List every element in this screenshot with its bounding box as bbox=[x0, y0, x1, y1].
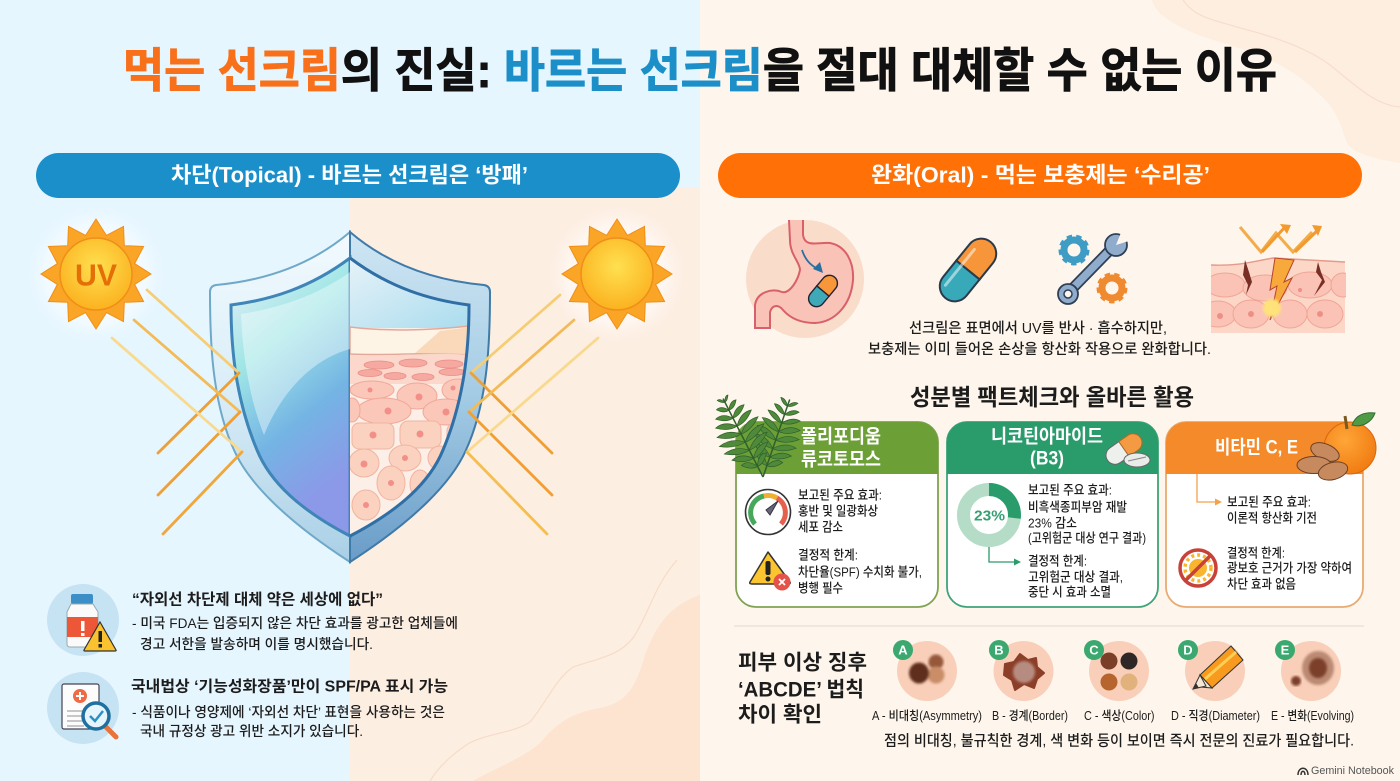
shield inner right rim bbox=[350, 258, 469, 536]
icon: no sun bbox=[1180, 550, 1216, 586]
card: nicotinamide: 보고된 주요 효과: bbox=[1028, 482, 1112, 498]
heading: ingredient fact check: 성분별 팩트체크와 올바른 활용 bbox=[910, 384, 1194, 410]
icon: sun bbox=[561, 218, 673, 330]
icon: stomach with capsule bbox=[746, 220, 864, 338]
text block: domestic law: 국내법상 ‘기능성화장품’만이 SPF/PA 표시 가능 bbox=[131, 678, 448, 696]
icon: C color: C bbox=[1089, 642, 1099, 658]
shield bbox=[210, 232, 490, 562]
icon: document with magnifier bbox=[47, 672, 119, 744]
icon: D diameter pencil: D bbox=[1183, 642, 1193, 658]
ABCDE labels: A - 비대칭(Asymmetry) bbox=[872, 709, 982, 723]
title: 먹는 선크림의 진실: 바르는 선크림을 절대 대체할 수 없는 이유 bbox=[123, 44, 1277, 96]
icon: pills bbox=[1102, 430, 1150, 468]
shield inner glass bbox=[231, 258, 350, 536]
card: polypodium bbox=[700, 386, 938, 607]
icon: B border bbox=[989, 640, 1054, 701]
icon: D diameter pencil bbox=[1178, 640, 1245, 701]
card: polypodium: 병행 필수 bbox=[798, 580, 843, 596]
card: vitamin C, E: 비타민 C, E bbox=[1215, 436, 1298, 458]
text block: domestic law: - 식품이나 영양제에 ‘자외선 차단’ 표현을 사용하는 것은 bbox=[132, 704, 445, 720]
icon: wrench and gears bbox=[1058, 230, 1132, 304]
header: oral bbox=[718, 153, 1362, 198]
text: mechanism explanation: 보충제는 이미 들어온 손상을 항산화 작용으로 완화합니다. bbox=[868, 341, 1211, 358]
icon: damaged skin bbox=[1211, 224, 1346, 333]
header: topical bbox=[36, 153, 680, 198]
header: topical: 차단(Topical) - 바르는 선크림은 ‘방패’ bbox=[171, 162, 528, 188]
icon: medicine bottle warning bbox=[47, 584, 119, 656]
watermark: Gemini Notebook bbox=[1311, 765, 1394, 777]
icon: UV rays left bbox=[112, 290, 242, 534]
card: vitamin C, E: 결정적 한계: bbox=[1227, 546, 1285, 560]
icon: C color bbox=[1084, 640, 1149, 701]
ABCDE labels bbox=[872, 709, 1354, 723]
card: vitamin C, E: 이론적 항산화 기전 bbox=[1227, 510, 1317, 526]
card: vitamin C, E: 차단 효과 없음 bbox=[1227, 576, 1296, 592]
heading: ABCDE rule: 차이 확인 bbox=[738, 704, 822, 726]
text: mechanism explanation bbox=[868, 320, 1211, 358]
ABCDE labels: E - 변화(Evolving) bbox=[1271, 709, 1354, 723]
text block: FDA warning: “자외선 차단제 대체 약은 세상에 없다” bbox=[132, 590, 383, 608]
ABCDE labels: D - 직경(Diameter) bbox=[1171, 709, 1260, 723]
icon: UV sun bbox=[40, 218, 152, 330]
header: oral: 완화(Oral) - 먹는 보충제는 ‘수리공’ bbox=[871, 162, 1210, 188]
card: polypodium: 보고된 주요 효과: bbox=[798, 488, 882, 502]
icon: fern bbox=[700, 386, 810, 488]
icon: E evolving bbox=[1275, 640, 1341, 701]
icon: E evolving: E bbox=[1281, 642, 1290, 658]
card: polypodium: 홍반 및 일광화상 bbox=[798, 504, 878, 518]
card: vitamin C, E: 광보호 근거가 가장 약하여 bbox=[1227, 560, 1352, 576]
card: vitamin C, E bbox=[1166, 413, 1376, 607]
ABCDE labels: B - 경계(Border) bbox=[992, 709, 1068, 723]
icon: warning with x bbox=[750, 552, 790, 590]
card: nicotinamide bbox=[947, 422, 1158, 607]
icon: gauge bbox=[746, 490, 790, 534]
card: polypodium: 결정적 한계: bbox=[798, 548, 858, 562]
text block: FDA warning: - 미국 FDA는 입증되지 않은 차단 효과를 광고한 업체들에 bbox=[132, 615, 458, 631]
heading: ABCDE rule bbox=[738, 652, 867, 726]
chart: 23% donut bbox=[964, 490, 1014, 540]
icon: UV rays right bbox=[467, 295, 598, 534]
card: polypodium: 세포 감소 bbox=[798, 520, 843, 534]
card: vitamin C, E: 보고된 주요 효과: bbox=[1227, 494, 1311, 510]
chart: 23% donut: 23% bbox=[974, 508, 1005, 524]
heading: ABCDE rule: ‘ABCDE’ 법칙 bbox=[738, 678, 864, 702]
icon: A asymmetry bbox=[893, 640, 957, 701]
text: mechanism explanation: 선크림은 표면에서 UV를 반사 · 흡수하지만, bbox=[909, 320, 1167, 337]
icon: B border: B bbox=[994, 642, 1004, 658]
skin cross section bbox=[350, 260, 468, 534]
card: polypodium: 차단율(SPF) 수치화 불가, bbox=[798, 564, 922, 580]
arrow: to effect bbox=[1197, 474, 1222, 506]
text block: FDA warning bbox=[47, 584, 458, 656]
icon: capsule bbox=[934, 233, 1002, 307]
card: nicotinamide: 비흑색종피부암 재발 bbox=[1028, 500, 1127, 514]
shield outer left half bbox=[210, 232, 350, 562]
text block: FDA warning: 경고 서한을 발송하며 이를 명시했습니다. bbox=[140, 636, 373, 652]
card: nicotinamide: (고위험군 대상 연구 결과) bbox=[1028, 530, 1146, 546]
ABCDE labels: C - 색상(Color) bbox=[1084, 709, 1154, 723]
arrow: to limitation bbox=[989, 547, 1021, 566]
card: polypodium: 폴리포디움 bbox=[801, 426, 881, 448]
icon: A asymmetry: A bbox=[898, 642, 908, 658]
callout: see a specialist: 점의 비대칭, 불규칙한 경계, 색 변화 등이 보이면 즉시 전문의 진료가 필요합니다. bbox=[884, 732, 1354, 750]
icon: orange and almonds bbox=[1297, 413, 1376, 483]
card: nicotinamide: 니코틴아마이드 bbox=[991, 426, 1103, 448]
card: nicotinamide: 결정적 한계: bbox=[1028, 554, 1087, 568]
card: nicotinamide: 중단 시 효과 소멸 bbox=[1028, 584, 1111, 600]
text block: domestic law: 국내 규정상 광고 위반 소지가 있습니다. bbox=[140, 723, 363, 739]
icon: UV sun: UV bbox=[75, 258, 117, 292]
shield outer right half bbox=[350, 232, 490, 562]
glass highlight bbox=[241, 272, 350, 435]
card: nicotinamide: 23% 감소 bbox=[1028, 516, 1077, 530]
text block: domestic law bbox=[47, 672, 448, 744]
card: nicotinamide: (B3) bbox=[1030, 448, 1064, 470]
card: nicotinamide: 고위험군 대상 결과, bbox=[1028, 570, 1123, 584]
card: polypodium: 류코토모스 bbox=[801, 450, 881, 470]
heading: ABCDE rule: 피부 이상 징후 bbox=[738, 652, 867, 674]
